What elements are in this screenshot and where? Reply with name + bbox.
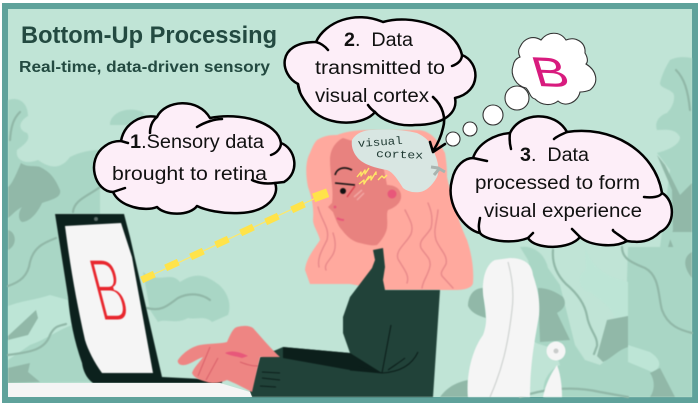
subtitle: Real-time, data-driven sensory: [19, 59, 270, 76]
thought bubbles trail: [446, 86, 529, 146]
illustration: chair: [468, 258, 566, 397]
illustration: laptop: [55, 214, 222, 383]
callout: step 2 cloud: [285, 17, 475, 125]
callout: step 2 cloud: visual cortex: [315, 86, 430, 107]
icon: gray scribble on cortex: [431, 167, 445, 175]
label: visual cortex: visual: [357, 136, 403, 151]
callout: step 2 cloud: transmitted to: [315, 58, 445, 79]
callout: step 1 cloud: brought to retina: [112, 164, 267, 185]
callout: step 3 cloud: [451, 116, 672, 247]
label: visual cortex: [357, 136, 424, 163]
callout: step 1 cloud: [94, 103, 294, 214]
icon: desk: [8, 383, 252, 397]
title: Bottom-Up Processing: [21, 22, 277, 49]
icon: neural sparks: [357, 168, 387, 184]
illustration: shirt and torso: [250, 248, 440, 397]
illustration: woman's hair: [305, 130, 473, 290]
callout: step 3 cloud: 3. Data: [520, 145, 589, 166]
letter on screen: B: [80, 239, 138, 340]
callout: step 3 cloud: processed to form: [475, 173, 640, 194]
illustration: face: [328, 138, 401, 245]
perceived letter: B: [526, 49, 575, 97]
arrow: cloud 2 to visual cortex: [430, 97, 445, 152]
arrow: dashed gaze line from screen to eye: [140, 189, 329, 283]
thought cloud with perceived letter: [512, 33, 596, 105]
callout: step 2 cloud: 2. Data: [344, 30, 413, 51]
callout: step 1 cloud: 1.Sensory data: [130, 132, 264, 153]
illustration: hands: [178, 326, 280, 392]
label: visual cortex: cortex: [376, 149, 424, 163]
callout: step 3 cloud: visual experience: [484, 201, 642, 222]
visual cortex region: [352, 130, 438, 192]
